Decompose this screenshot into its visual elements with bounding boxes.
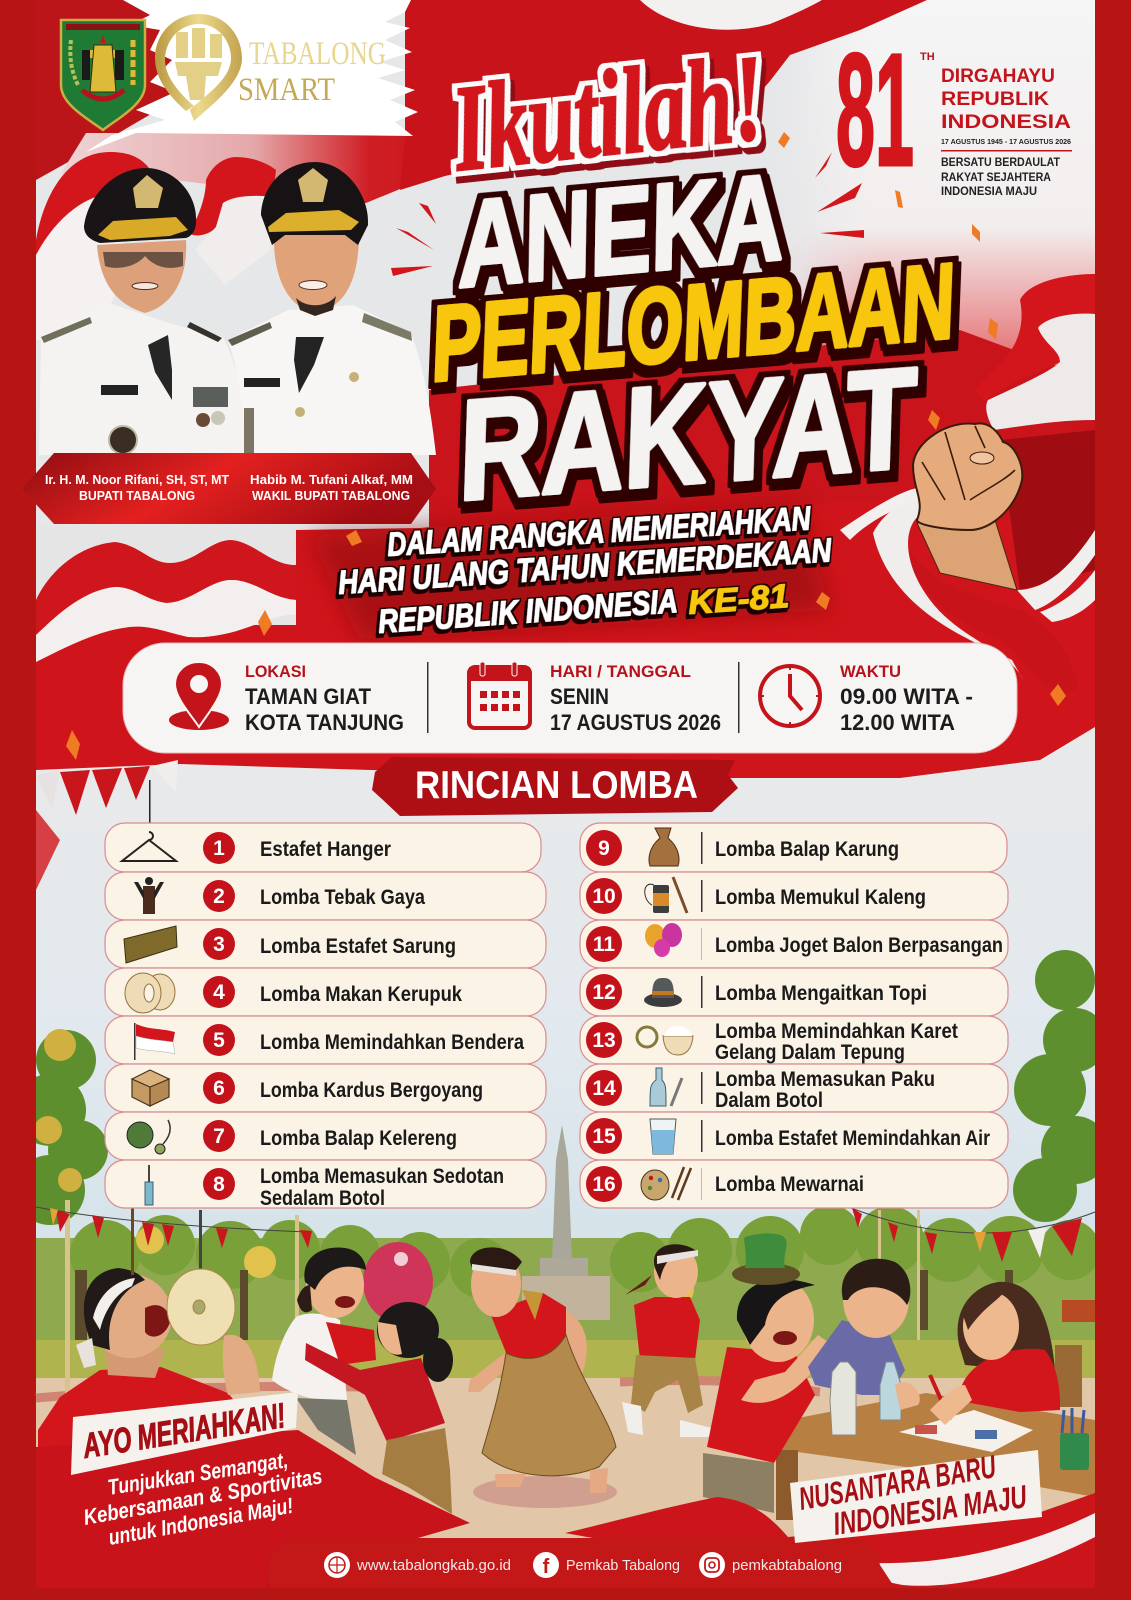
row 3: 3: [213, 933, 225, 956]
name: Bupati: Ir. H. M. Noor Rifani, SH, ST, MT: [45, 472, 229, 487]
date text: 17 AGUSTUS 2026: [550, 710, 721, 735]
upper background area: [36, 0, 1095, 540]
row 8: 8: [213, 1173, 225, 1196]
red and white ribbon bottom right: [565, 1493, 1095, 1588]
callout message: [82, 1447, 324, 1550]
subtitle: KE-81: [687, 577, 790, 621]
icon: hanger: [122, 832, 176, 861]
illustration: small running girl: [622, 1244, 712, 1437]
row 13: Lomba Memindahkan Karet: [715, 1020, 958, 1043]
row 11: [580, 920, 1008, 968]
time text: WAKTU: [840, 662, 901, 681]
name: Wakil Bupati: WAKIL BUPATI TABALONG: [252, 488, 410, 503]
icon: cardboard box: [132, 1070, 169, 1106]
row 14: [580, 1064, 1008, 1112]
row 13: 13: [592, 1029, 616, 1052]
row 10: 10: [592, 885, 616, 908]
right side flag: [974, 274, 1095, 430]
row 14: Lomba Memasukan Paku: [715, 1068, 935, 1091]
anniversary text: INDONESIA MAJU: [941, 184, 1037, 198]
icon: person posing: [134, 877, 164, 914]
illustration: boy with green hat: [703, 1233, 832, 1513]
logo text: Tabalong Smart: TABALONG: [249, 36, 386, 72]
ground: [36, 1378, 1095, 1548]
red flag at the top centre: [400, 0, 927, 190]
icon: clock: [760, 666, 820, 726]
date text: HARI / TANGGAL: [550, 662, 691, 681]
row 12: 12: [592, 981, 616, 1004]
anniversary text: REPUBLIK: [941, 89, 1049, 110]
row 4: [105, 968, 546, 1016]
callout message: untuk Indonesia Maju!: [107, 1493, 295, 1550]
row 15: [580, 1112, 1008, 1160]
name: Wakil Bupati: Habib M. Tufani Alkaf, MM: [250, 472, 413, 487]
row 4: Lomba Makan Kerupuk: [260, 983, 462, 1006]
location text: KOTA TANJUNG: [245, 710, 404, 735]
icon: marble and spoon: [127, 1120, 170, 1154]
icon: calendar: [469, 662, 530, 728]
red and white flags behind officials: [36, 152, 276, 340]
location text: TAMAN GIAT: [245, 684, 372, 709]
anniversary text: BERSATU BERDAULAT: [941, 155, 1061, 169]
callout message: Tunjukkan Semangat,: [106, 1447, 290, 1500]
row 16: Lomba Mewarnai: [715, 1173, 864, 1196]
name: Wakil Bupati: [250, 472, 413, 503]
row 3: Lomba Estafet Sarung: [260, 935, 456, 958]
row 11: 11: [593, 933, 615, 956]
row 2: Lomba Tebak Gaya: [260, 886, 425, 909]
anniversary text: INDONESIA: [941, 112, 1071, 133]
row 15: 15: [592, 1125, 616, 1148]
callout: Ayo Meriahkan: AYO MERIAHKAN!: [80, 1396, 288, 1466]
row 13: [580, 1016, 1008, 1064]
icon: facebook: f: [543, 1556, 550, 1578]
icon: bottle with straw: [145, 1165, 153, 1205]
row 8: Sedalam Botol: [260, 1187, 385, 1210]
icon: instagram: [699, 1552, 725, 1578]
row 10: Lomba Memukul Kaleng: [715, 886, 926, 909]
bunting and hanger wire: [36, 760, 178, 890]
callout: Nusantara Baru: INDONESIA MAJU: [831, 1478, 1030, 1542]
anniversary text: [941, 66, 1072, 198]
row 8: [105, 1160, 546, 1210]
section heading: Rincian Lomba: RINCIAN LOMBA: [415, 764, 698, 807]
poles and scene bunting: [36, 1200, 1095, 1405]
fist with flag ribbon: [840, 423, 1095, 692]
background trees: [14, 950, 1109, 1380]
illustration: girl drawing: [930, 1282, 1095, 1425]
icon: glass of water: [650, 1119, 676, 1154]
row 7: 7: [213, 1125, 225, 1148]
website url: www.tabalongkab.go.id: [356, 1557, 511, 1574]
section heading: Rincian Lomba: [372, 757, 738, 816]
row 9: Lomba Balap Karung: [715, 838, 899, 861]
row 12: [580, 968, 1008, 1016]
title line: ANEKA: ANEKA: [458, 147, 785, 313]
icon: palette and brushes: [641, 1167, 691, 1200]
row 9: 9: [598, 837, 610, 860]
row 12: Lomba Mengaitkan Topi: [715, 982, 927, 1005]
heading: Ikutilah!: Ikutilah!: [445, 30, 771, 197]
location text: [245, 662, 404, 735]
row 16: 16: [592, 1173, 616, 1196]
illustration: boy in purple: [808, 1259, 920, 1435]
row 4: 4: [213, 981, 225, 1004]
row 10: [580, 872, 1008, 920]
row 7: Lomba Balap Kelereng: [260, 1127, 457, 1150]
illustration: sack race boy: [468, 1247, 616, 1493]
icon: sack: [649, 828, 679, 866]
row 14: Dalam Botol: [715, 1089, 823, 1112]
icon: flag: [134, 1023, 175, 1060]
row 1: 1: [213, 837, 225, 860]
red ribbon bottom left: [36, 1430, 470, 1588]
illustration: table with bottles: [761, 1375, 1095, 1520]
time text: 12.00 WITA: [840, 710, 955, 735]
name: Bupati: [45, 472, 229, 503]
subtitle: HARI ULANG TAHUN KEMERDEKAAN: [337, 531, 833, 601]
facebook name: Pemkab Tabalong: [566, 1557, 680, 1574]
icon: location pin: [169, 662, 229, 730]
row 6: 6: [213, 1077, 225, 1100]
middle red band with left waving flag: [36, 500, 1095, 778]
time text: [840, 662, 973, 735]
81th anniversary logo: TH: [920, 51, 935, 63]
icon: can and stick: [645, 877, 687, 913]
row 11: Lomba Joget Balon Berpasangan: [715, 934, 1003, 957]
anniversary text: RAKYAT SEJAHTERA: [941, 170, 1051, 184]
row 5: [105, 1016, 546, 1064]
icon: rubber bands and flour: [637, 1026, 693, 1055]
callout message: Kebersamaan & Sportivitas: [82, 1463, 324, 1530]
icon: bottle and nail: [650, 1068, 682, 1106]
official portrait: Wakil Bupati: [228, 162, 436, 455]
row 9: [580, 823, 1007, 872]
logo: gold location pin: [155, 14, 242, 121]
footer bar: [267, 1538, 895, 1588]
torn white logo panel: [86, 0, 418, 152]
date text: [550, 662, 721, 735]
logo text: Tabalong Smart: [238, 36, 386, 108]
logo: Tabalong shield: [61, 20, 145, 130]
row 6: [105, 1064, 546, 1112]
row 5: 5: [213, 1029, 225, 1052]
monument: [522, 1125, 610, 1320]
row 13: Gelang Dalam Tepung: [715, 1041, 905, 1064]
row 7: [105, 1112, 546, 1160]
row 1: Estafet Hanger: [260, 838, 391, 861]
subtitle: [337, 499, 833, 640]
date text: SENIN: [550, 684, 609, 709]
row 8: Lomba Memasukan Sedotan: [260, 1165, 504, 1188]
icon: balloons: [645, 923, 682, 957]
row 2: 2: [213, 885, 225, 908]
title line: RAKYAT: RAKYAT: [457, 338, 919, 531]
info card: [123, 643, 1017, 753]
name banner: [22, 453, 436, 524]
illustration: girl in red: [305, 1302, 453, 1514]
anniversary text: 17 AGUSTUS 1945 - 17 AGUSTUS 2026: [941, 139, 1071, 146]
row 3: [105, 920, 546, 968]
logo text: Tabalong Smart: SMART: [238, 72, 335, 108]
name: Bupati: BUPATI TABALONG: [79, 488, 195, 503]
81th anniversary logo: 81: [836, 20, 914, 199]
row 2: [105, 872, 546, 920]
callout: Nusantara Baru: NUSANTARA BARU: [796, 1448, 999, 1517]
icon: website: [324, 1552, 350, 1578]
row 15: Lomba Estafet Memindahkan Air: [715, 1127, 990, 1150]
row 16: [580, 1160, 1008, 1208]
subtitle: REPUBLIK INDONESIA: [377, 582, 679, 640]
anniversary text: DIRGAHAYU: [941, 66, 1055, 87]
row 14: 14: [592, 1077, 616, 1100]
confetti: [66, 132, 1066, 760]
callout: Nusantara Baru: [790, 1448, 1042, 1543]
illustration: man eating kerupuk: [38, 1205, 260, 1470]
main title: [430, 147, 957, 531]
subtitle: DALAM RANGKA MEMERIAHKAN: [386, 499, 813, 563]
list: right column: [580, 823, 1008, 1208]
instagram name: pemkabtabalong: [732, 1557, 842, 1574]
time text: 09.00 WITA -: [840, 684, 973, 709]
illustration: girl with balloon: [272, 1242, 433, 1455]
location text: LOKASI: [245, 662, 306, 681]
row 6: Lomba Kardus Bergoyang: [260, 1079, 483, 1102]
row 1: [105, 823, 541, 872]
list: left column: [105, 823, 546, 1210]
official portrait: Bupati: [39, 168, 249, 455]
icon: sarung: [124, 926, 177, 963]
icon: kerupuk: [125, 973, 175, 1013]
icon: hat: [644, 978, 682, 1007]
red burst strokes around title: [391, 152, 864, 276]
callout: Ayo Meriahkan: [71, 1392, 324, 1550]
row 5: Lomba Memindahkan Bendera: [260, 1031, 524, 1054]
icon: facebook: [533, 1552, 559, 1578]
lower sky background: [36, 727, 1095, 1240]
